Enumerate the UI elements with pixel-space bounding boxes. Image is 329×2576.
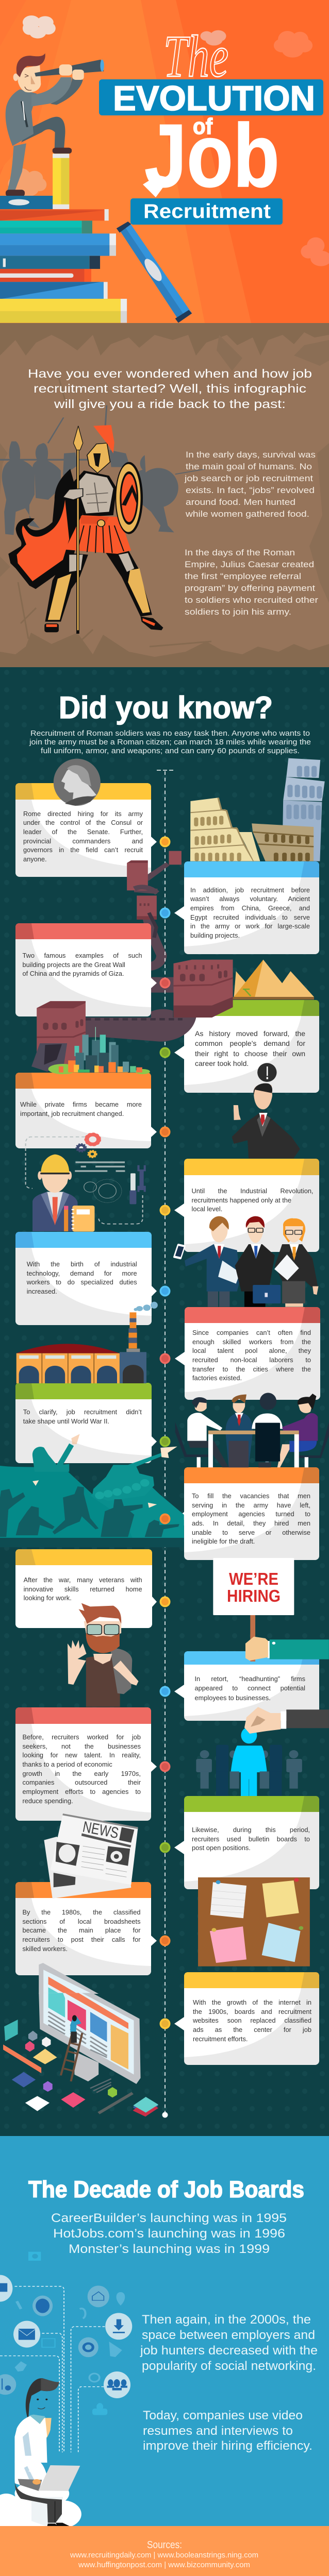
text: As history moved forward: As history moved forward, the: [195, 1029, 305, 1038]
text: To fill the vacancies: [192, 1492, 310, 1545]
text: we're hiring: HIRING: [227, 1586, 281, 1605]
panel: left card 5 green: [15, 1383, 157, 1463]
panel: right card 1 blue: [174, 861, 319, 954]
panel: orange footer background: [0, 2526, 329, 2576]
panel: left card 3 orange: [15, 1073, 157, 1148]
text: Two famous examples: [23, 952, 142, 977]
text: recruitment of Roman soldiers: join the army must be a Roman citizen; can march 18 miles while wearing the: [29, 738, 311, 747]
text: While private firms: important, job recruitment changed.: [20, 1110, 124, 1117]
text: Until the Industrial Revolution: Until the Industrial Revolution,: [192, 1187, 314, 1195]
icon: stack of books with pencil and level: [0, 154, 329, 323]
text: 2000s paragraph: popularity of social networking.: [142, 2359, 316, 2373]
shield: [115, 462, 143, 534]
timeline bullets: [160, 837, 170, 2117]
torso: [71, 470, 117, 517]
text: Roman Empire: the first “employee referral: [185, 572, 301, 581]
text: With the growth of the internet: the 1900s, boards and recruitment: [193, 2008, 311, 2015]
text: recruitment of Roman soldiers: Recruitment of Roman soldiers was no easy task then. Anyone who wants to: [30, 729, 310, 738]
panel: right card 7 green: [174, 1796, 319, 1889]
text: In retort: [195, 1675, 305, 1702]
text: Since companies: factories existed.: [192, 1374, 242, 1382]
tank: [92, 1453, 163, 1501]
text: Rome directed hiring: leader of the Senate. Further,: [23, 828, 143, 836]
text: Roman Empire: In the days of the Roman: [185, 548, 295, 557]
text: today paragraph: improve their hiring efficiency.: [143, 2439, 312, 2453]
text: sources: [70, 2539, 258, 2569]
dashed connectors: [0, 2286, 105, 2452]
icon: factory: [17, 1328, 146, 1383]
cape: [8, 469, 84, 589]
text: To clarify: take shape until World War II.: [23, 1417, 109, 1425]
text: As history moved forward: career took hold.: [195, 1059, 249, 1067]
text: Likewise: recruiters used bulletin boards to: [192, 1835, 310, 1843]
icon: newspaper: [44, 1814, 138, 1899]
panel: left card 8 orange: [15, 1882, 157, 1975]
text: early days: exists. In fact, “jobs” revolved: [186, 486, 315, 495]
text: By the 1980s: sections of local broadsheets: [23, 1918, 140, 1925]
timeline line: [157, 770, 173, 2112]
dashed path and gears: [26, 1133, 145, 1224]
text: Since companies: local talent pool alone, they: [192, 1347, 311, 1354]
text: we're hiring: WE’RE: [229, 1569, 278, 1588]
text: To fill the vacancies: serving in the army have left,: [192, 1501, 310, 1509]
kilt: [65, 515, 131, 554]
panel: right card 5 orange: [174, 1467, 319, 1560]
text: Before, recruiters: thanks to a period of economic: [23, 1760, 112, 1768]
hand: [63, 488, 83, 500]
text: To fill the vacancies: ineligible for the draft.: [192, 1537, 255, 1545]
text: After the war: looking for work.: [24, 1594, 72, 1602]
text: Rome directed hiring: [23, 810, 143, 863]
mortar: [32, 1447, 69, 1472]
text: After the war: innovative skills returned home: [24, 1585, 142, 1593]
text: Roman Empire: to soldiers who recruited other: [185, 596, 319, 605]
text: early days: the main goal of humans. No: [186, 462, 312, 471]
heading band: Recruitment: [130, 198, 283, 225]
text: After the war: After the war, many veterans with: [24, 1576, 142, 1584]
text: sources: www.recruitingdaily.com | www.booleanstrings.ning.com: [70, 2551, 258, 2560]
icon: leaning tower: [282, 758, 325, 861]
text: In addition: [190, 886, 310, 939]
text: Roman Empire: [185, 548, 319, 617]
panel: left card 2 red: [15, 923, 157, 1016]
icon: worker: [32, 1155, 94, 1232]
text: In addition: Egypt recruited individuals to serve: [190, 913, 310, 921]
text: Since companies: Since companies can’t often find: [192, 1329, 311, 1336]
text: launch dates: HotJobs.com’s launching was in 1996: [53, 2227, 285, 2241]
text: Roman Empire: Empire, Julius Caesar created: [185, 560, 314, 569]
text: With the growth of the internet: recruitment efforts.: [193, 2035, 248, 2043]
icon: man with telescope: [6, 53, 104, 197]
text: Likewise: [192, 1826, 310, 1852]
spear: [76, 438, 79, 634]
text: Before, recruiters: companies outsourced their: [23, 1778, 141, 1786]
text: launch dates: [51, 2211, 287, 2256]
icon circles: [0, 2252, 132, 2415]
panel: orange header background: [0, 0, 329, 323]
text: Before, recruiters: employment efforts to agencies to: [23, 1788, 141, 1795]
text: As history moved forward: their right to choose their own: [195, 1049, 305, 1058]
text: today paragraph: [143, 2409, 312, 2453]
text: To fill the vacancies: ads. In detail, they hired men: [192, 1519, 310, 1527]
text: sources: www.huffingtonpost.com | www.bizcommunity.com: [78, 2561, 250, 2569]
text: With the growth of the internet: With the growth of the internet in: [193, 1998, 311, 2006]
text: To clarify: To clarify, job recruitment didn’t: [23, 1408, 142, 1416]
text: By the 1980s: recruiters to post their calls for: [23, 1936, 140, 1943]
intro heading text: recruitment started? Well, this infographic: [34, 382, 306, 395]
panel: right card 4 red: [175, 1307, 320, 1400]
illustration: factory, meeting and war scene: [0, 1328, 329, 1547]
panel: left card 6 gold: [15, 1549, 157, 1628]
text: launch dates: CareerBuilder’s launching was in 1995: [51, 2211, 287, 2225]
icon: monitor top edge: [39, 1963, 98, 1994]
icon: city skyline: [48, 1027, 150, 1074]
text: sources: Sources:: [147, 2539, 182, 2551]
icon: Caesar bust: [54, 759, 101, 806]
helmet: [87, 443, 110, 473]
panel: right card 3 gold: [174, 1159, 319, 1252]
text: Two famous examples: of China and the pyramids of Giza.: [23, 970, 124, 977]
illustration: Roman bust and monuments: [54, 758, 325, 861]
intro heading text: will give you a ride back to the past:: [54, 397, 286, 411]
illustration: hiring sign and veteran: [68, 1558, 329, 1772]
text: early days: In the early days, survival was: [186, 450, 316, 460]
text: Until the Industrial Revolution: recruitments happened only at the: [192, 1196, 291, 1204]
text: Before, recruiters: reduce spending.: [23, 1797, 73, 1805]
text: In retort: employees to businesses.: [195, 1694, 271, 1702]
text: Roman Empire: program” by offering payment: [185, 584, 316, 593]
text: recruitment of Roman soldiers: full uniform, armor, and weapons; and can carry 60 pounds of supplies.: [41, 747, 300, 755]
panel: left card 1 gold: [15, 783, 157, 877]
text: 2000s paragraph: job hunters decreased with the: [140, 2344, 318, 2358]
icon: person with laptop on cloud: [0, 2378, 81, 2534]
text: Until the Industrial Revolution: [192, 1187, 314, 1213]
suit of man: [232, 1105, 300, 1158]
person on ladder: [70, 2015, 81, 2043]
illustration: wall running behind cards: [134, 864, 174, 985]
text: Rome directed hiring: governors in the field can’t recruit: [23, 846, 143, 854]
icon: man with exclamation: [254, 1063, 277, 1109]
text: today paragraph: Today, companies use video: [143, 2409, 303, 2422]
text: Rome directed hiring: under the control of the Consul or: [23, 819, 143, 826]
heading: The Decade of Job Boards: The Decade of Job Boards: [28, 2176, 304, 2202]
text: In addition: In addition, job recruitment before: [190, 886, 310, 893]
text: early days: while women gathered food.: [185, 510, 309, 519]
text: Roman Empire: soldiers to join his army.: [185, 607, 291, 617]
silhouettes of soldiers: [0, 405, 205, 535]
text: As history moved forward: [195, 1029, 305, 1067]
text: Two famous examples: building projects are the Great Wall: [23, 961, 125, 969]
icon: hand picking candidate: [196, 1707, 329, 1772]
text: With the birth of industrial technology: technology, demand for more: [27, 1269, 137, 1277]
text: Before, recruiters: looking for new talent. In reality,: [23, 1751, 141, 1759]
panel: left card 7 red: [15, 1707, 157, 1821]
people legs: [200, 1771, 298, 1796]
text: Rome directed hiring: anyone.: [23, 855, 47, 863]
text: With the growth of the internet: [193, 1998, 311, 2043]
ladder: [61, 2032, 82, 2081]
icon: war scene: [0, 1434, 184, 1547]
text: While private firms: [20, 1100, 142, 1117]
isometric items: [3, 2020, 158, 2116]
heading: Did you know: Did you know?: [59, 690, 273, 725]
panel: right card 8 gold: [174, 1972, 319, 2065]
text: After the war: [24, 1576, 142, 1602]
icon: chimney smoke: [129, 1302, 158, 1328]
text: today paragraph: resumes and interviews to: [143, 2424, 293, 2438]
icon: clouds in header: [8, 15, 312, 197]
text: By the 1980s: [23, 1908, 140, 1953]
text: 2000s paragraph: space between employers and: [142, 2328, 315, 2342]
text: recruitment of Roman soldiers: [29, 729, 311, 755]
text: To fill the vacancies: employment agencies turned to: [192, 1510, 310, 1518]
text: Rome directed hiring: provincial commanders and: [23, 837, 143, 845]
wall tower upper: [127, 851, 182, 938]
text: 2000s paragraph: Then again, in the 2000s, the: [142, 2313, 311, 2327]
legs and greaves: [45, 553, 88, 622]
text: Since companies: transfer to the cities where the: [192, 1365, 311, 1373]
text: early days: job search or job recruitment: [184, 474, 314, 483]
illustration: computer monitor with isometric icons: [3, 1993, 158, 2116]
text: With the birth of industrial technology: [27, 1260, 137, 1295]
text: Two famous examples: Two famous examples of such: [23, 952, 142, 959]
text: we're hiring: [227, 1569, 281, 1605]
text: With the birth of industrial technology: increased.: [27, 1287, 57, 1295]
heading: Job: Job: [144, 105, 279, 206]
panel: brown intro background: [0, 323, 329, 667]
text: In addition: empires from China, Greece, and: [190, 904, 310, 912]
panel: right card 2 green: [174, 1000, 319, 1093]
text: To fill the vacancies: unable to serve or otherwise: [192, 1529, 310, 1536]
text: In retort: appeared to connect potential: [195, 1684, 305, 1692]
text: 2000s paragraph: [140, 2313, 318, 2373]
text: launch dates: Monster’s launching was in 1999: [69, 2242, 270, 2256]
text: While private firms: While private firms became more: [20, 1100, 142, 1108]
soldiers: [0, 1486, 179, 1537]
icon: meeting around table: [175, 1393, 329, 1467]
panel: blue section background: [0, 2136, 329, 2526]
panel: left card 4 blue: [15, 1232, 157, 1325]
intro heading text: [28, 367, 312, 411]
panel: dark teal timeline background: [0, 667, 329, 2136]
panel: right card 6 blue: [174, 1651, 319, 1721]
text: Before, recruiters: seekers, not the businesses: [23, 1742, 141, 1750]
text: With the birth of industrial technology: With the birth of industrial: [27, 1260, 137, 1268]
wall band and pyramids: [31, 960, 314, 1072]
text: Since companies: [192, 1329, 311, 1382]
text: In addition: in the army or work for large-scale: [190, 922, 310, 930]
text: NEWS headline: NEWS: [81, 1818, 120, 1842]
illustration: people bottom, newspaper, corkboard: [39, 1771, 310, 1994]
heading band: Recruitment: Recruitment: [143, 200, 271, 223]
icon: three business people: [173, 1216, 319, 1307]
text: In addition: wasn’t always voluntary. Ancient: [190, 895, 310, 903]
icon: we're hiring sign: [213, 1558, 329, 1662]
heading: of: of: [193, 114, 212, 139]
text: Likewise: post open positions.: [192, 1844, 251, 1852]
text: early days: [184, 450, 316, 519]
intro heading text: Have you ever wondered when and how job: [28, 367, 312, 380]
text: To clarify: [23, 1408, 142, 1425]
text: With the birth of industrial technology: workers to do specialized duties: [27, 1278, 137, 1286]
illustration: Roman soldier with silhouettes: [0, 405, 205, 634]
text: Likewise: Likewise, during this period,: [192, 1826, 310, 1834]
text: With the growth of the internet: ads as the center for job: [193, 2026, 311, 2033]
text: Since companies: enough skilled workers from the: [192, 1338, 311, 1346]
text: In addition: building projects.: [190, 931, 240, 939]
icon: colosseum: [190, 798, 314, 861]
illustration: Great Wall and pyramids: [31, 851, 314, 1109]
text: Before, recruiters: growth in the early 1970s,: [23, 1770, 141, 1777]
text: Until the Industrial Revolution: local level.: [192, 1205, 222, 1213]
text: Before, recruiters: Before, recruiters worked for job: [23, 1733, 141, 1741]
heading: The: The: [163, 24, 228, 90]
text: Rome directed hiring: Rome directed hiring for its army: [23, 810, 143, 817]
text: As history moved forward: common people’s demand for: [195, 1039, 305, 1047]
text: By the 1980s: By the 1980s, the classified: [23, 1908, 140, 1916]
text: To fill the vacancies: To fill the vacancies that men: [192, 1492, 310, 1500]
icon: corkboard with notes: [198, 1877, 310, 1967]
illustration: social network icons and dashed connectors: [0, 2252, 132, 2534]
heading band: Evolution: EVOLUTION: [113, 79, 315, 118]
text: By the 1980s: became the main place for: [23, 1926, 140, 1934]
text: By the 1980s: skilled workers.: [23, 1945, 68, 1953]
text: With the growth of the internet: websites soon replaced classified: [193, 2016, 311, 2024]
text: early days: around food. Men hunted: [186, 498, 295, 507]
illustration: businessman and worker: [26, 1105, 319, 1328]
text: Since companies: recruited non-local laborers to: [192, 1356, 311, 1364]
text: In retort: In retort, “headhunting” firms: [195, 1675, 305, 1683]
text: Before, recruiters: [23, 1733, 141, 1805]
icon: hipster veteran: [68, 1603, 138, 1707]
